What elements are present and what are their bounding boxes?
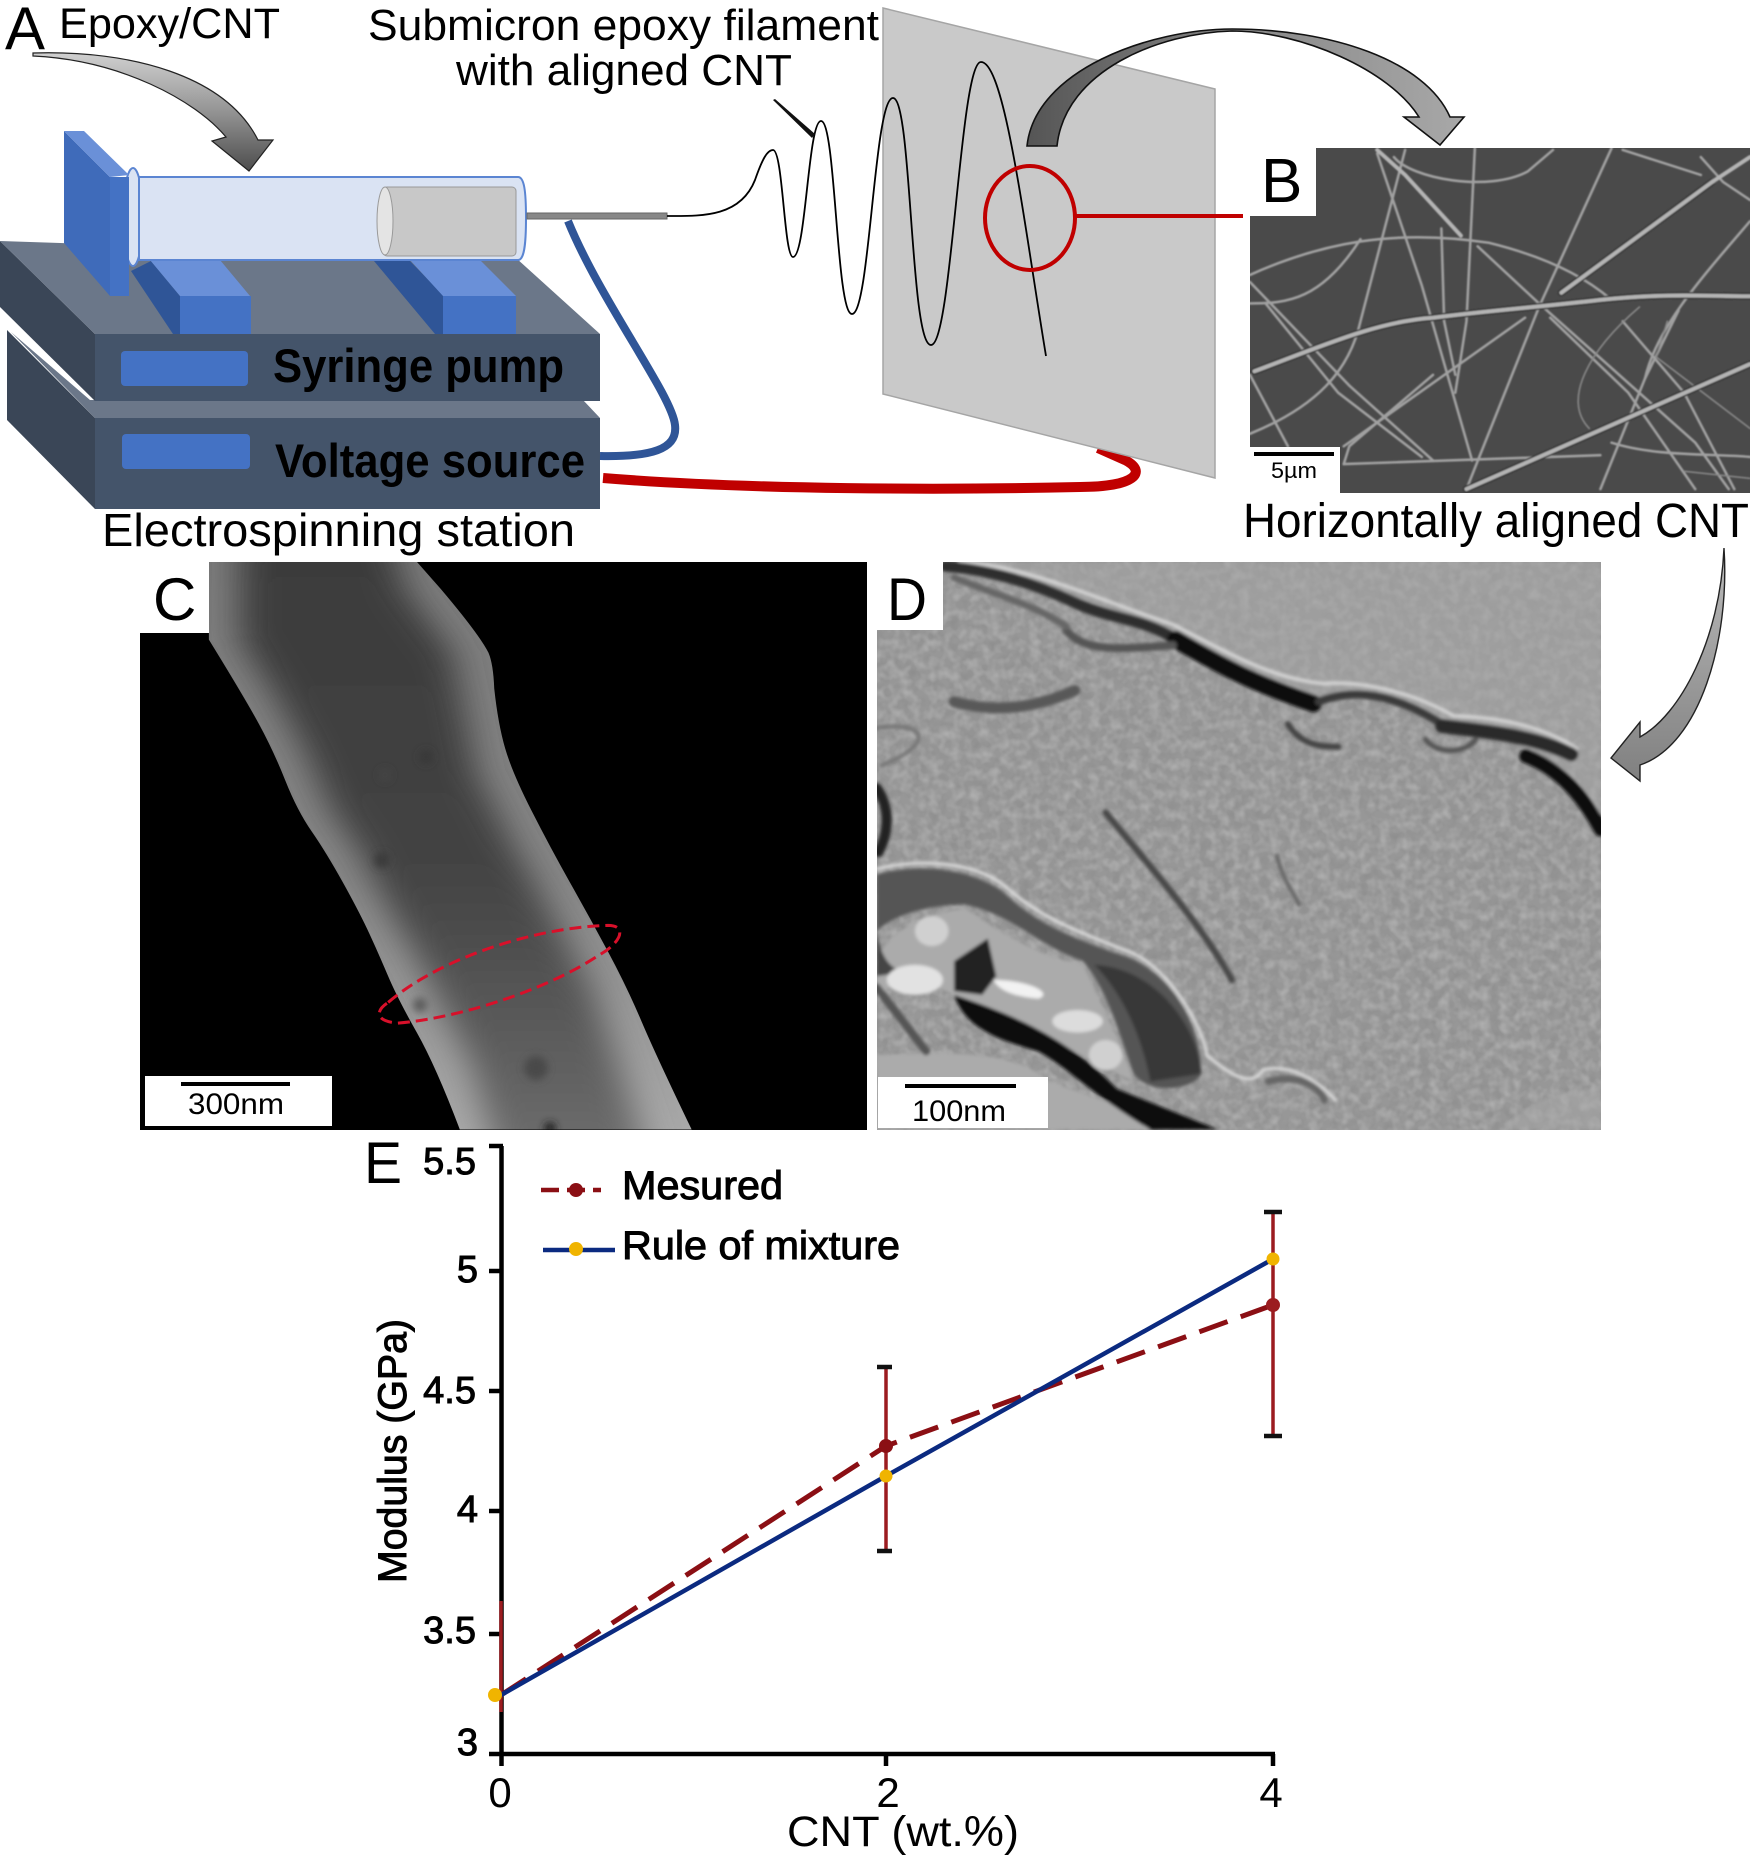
filament: [208, 562, 692, 1130]
arrow: into syringe: [33, 53, 273, 171]
scale bar: 100 nm: [878, 1077, 1048, 1128]
y axis: 3.5: [423, 1610, 476, 1652]
collector plate: [883, 8, 1215, 478]
station: syringe pump block: Syringe pump: [273, 339, 564, 392]
y axis: 5.5: [423, 1141, 476, 1183]
station: voltage source block: [7, 330, 600, 509]
station: syringe pump block: [0, 241, 600, 401]
station: voltage source block: Voltage source: [275, 434, 585, 487]
syringe supports: [131, 260, 516, 334]
blue wire: [568, 221, 675, 456]
label: Submicron epoxy filament with aligned CNT: [368, 1, 879, 95]
error bars: [501, 1212, 1282, 1712]
label: panel B: [1250, 147, 1316, 216]
y axis: 4: [457, 1489, 478, 1531]
scale bar: 5 micrometres: 5µm: [1271, 458, 1317, 483]
axis title: CNT (wt.%): CNT (wt.%): [787, 1808, 1019, 1855]
zoom circle and connector: [985, 166, 1243, 270]
label: panel E: E: [364, 1131, 402, 1196]
label: Submicron epoxy filament with aligned CNT: with aligned CNT: [455, 46, 792, 95]
y axis: 5: [457, 1249, 478, 1291]
series: measured, dashed: [501, 1305, 1273, 1695]
arrow: plate to panel B: [1027, 29, 1464, 146]
legend: [541, 1164, 900, 1268]
panel B: SEM of aligned fibers: [1250, 147, 1750, 493]
x axis: 4: [1259, 1769, 1283, 1816]
legend: Rule of mixture: [622, 1224, 900, 1268]
TEM texture noise: [877, 562, 1601, 1130]
x axis: [488, 1754, 1283, 1816]
caption: Electrospinning station: Electrospinning station: [102, 504, 575, 556]
SEM fibers: [1250, 148, 1750, 489]
axis title: Modulus (GPa): Modulus (GPa): [371, 1319, 415, 1583]
label: panel D: D: [887, 566, 927, 633]
legend: Mesured: [622, 1164, 783, 1208]
x axis: 0: [488, 1769, 512, 1816]
series: rule of mixture: [501, 1259, 1273, 1695]
scale bar: 300 nm: 300nm: [188, 1088, 284, 1121]
data markers: [488, 1252, 1280, 1702]
label: panel C: [140, 562, 209, 633]
label: Submicron epoxy filament with aligned CNT: Submicron epoxy filament: [368, 1, 879, 50]
syringe plate: [64, 131, 129, 296]
label: Epoxy/CNT: Epoxy/CNT: [59, 0, 280, 48]
dashed section outline: [379, 925, 620, 1023]
y axis: [423, 1141, 503, 1764]
panel E: modulus vs CNT chart: [364, 1131, 1283, 1855]
x axis: 2: [876, 1769, 900, 1816]
scale bar: 300 nm: [145, 1076, 332, 1126]
scale bar: 5 micrometres: [1250, 447, 1340, 493]
panel C: single filament micrograph: [140, 562, 867, 1130]
epoxy filament: [667, 62, 1046, 356]
arrow: caption to panel D: [1611, 548, 1725, 781]
pointer to filament: [773, 99, 815, 138]
y axis: 4.5: [423, 1370, 476, 1412]
y axis: 3: [457, 1722, 478, 1764]
panel D: TEM micrograph: [877, 561, 1601, 1130]
needle: [527, 213, 667, 219]
TEM flake and nanotubes: [877, 561, 1601, 1130]
syringe barrel and plunger: [123, 168, 526, 266]
scale bar: 100 nm: 100nm: [912, 1095, 1006, 1128]
panel A: electrospinning setup: [0, 0, 1464, 556]
label: panel C: C: [153, 566, 196, 633]
red wire: [603, 448, 1136, 489]
label: panel B: B: [1261, 147, 1302, 216]
label: panel D: [877, 562, 943, 633]
